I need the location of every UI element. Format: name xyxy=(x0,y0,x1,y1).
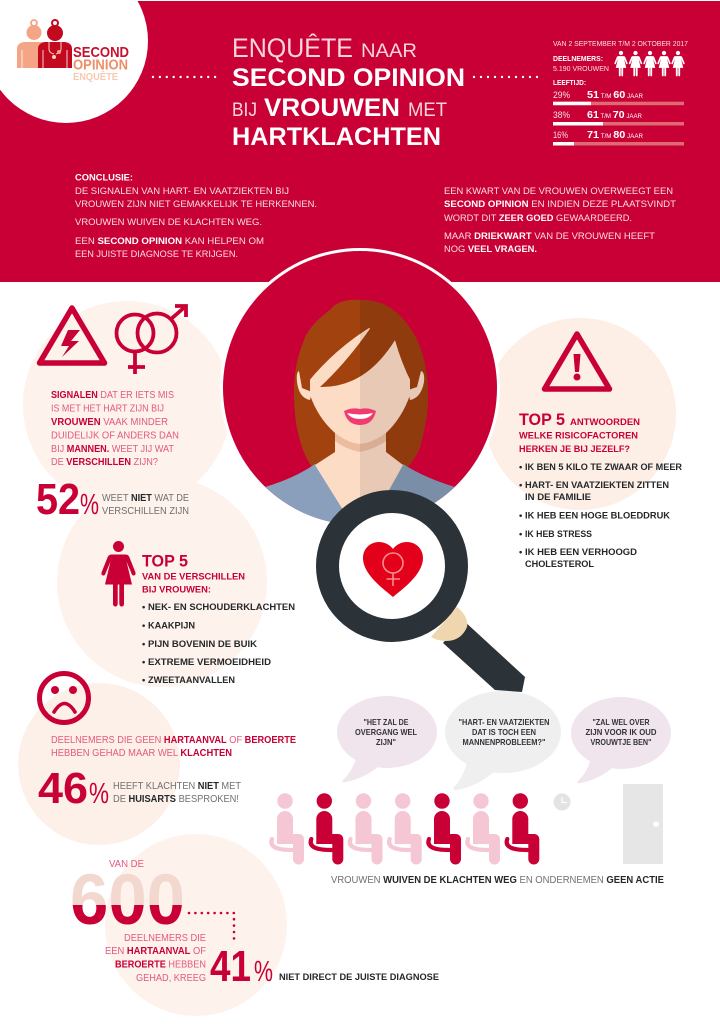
panel: top 5 risk factors: HART- EN VAATZIEKTEN ZITTEN xyxy=(525,479,669,490)
waiting room: seated women xyxy=(271,793,539,864)
panel: top 5 risk factors: IK HEB STRESS xyxy=(525,528,592,539)
text block: signals: SIGNALEN DAT ER IETS MIS xyxy=(51,390,174,401)
panel: top 5 differences: NEK- EN SCHOUDERKLACHTEN xyxy=(148,601,295,612)
text block: signals xyxy=(51,390,179,468)
background circle: signals xyxy=(23,301,231,509)
portrait: woman in red circle xyxy=(220,248,500,540)
background circle: complaints xyxy=(18,683,180,845)
magnifying glass xyxy=(328,502,525,692)
speech bubble: oud vrouwtje: ZIJN VOOR IK OUD xyxy=(586,727,656,737)
background circle: top 5 differences xyxy=(57,477,267,687)
text block: conclusion: CONCLUSIE: xyxy=(75,172,133,184)
stat: 52 percent: % xyxy=(80,489,99,521)
logo: second opinion enquete: OPINION xyxy=(73,58,128,74)
age bar 71-80: 16% xyxy=(553,130,568,141)
title: VROUWEN xyxy=(264,94,400,122)
icon: door xyxy=(623,784,663,864)
text block: conclusion: DE SIGNALEN VAN HART- EN VAATZIEKTEN BIJ xyxy=(75,186,289,197)
panel: top 5 risk factors: IN DE FAMILIE xyxy=(525,491,591,502)
title: ENQUÊTE xyxy=(232,32,353,63)
title: MET xyxy=(408,100,447,121)
panel: survey details: DEELNEMERS: xyxy=(553,54,603,63)
panel: top 5 risk factors: HERKEN JE BIJ JEZELF? xyxy=(519,444,630,455)
header band xyxy=(0,1,720,282)
stat: 52 percent: WEET NIET WAT DE xyxy=(102,493,189,504)
number: 600 partly filled xyxy=(72,874,182,924)
panel: top 5 differences: • xyxy=(142,620,145,630)
panel: top 5 risk factors xyxy=(519,410,682,569)
stat: 46 percent: 46 xyxy=(38,764,88,813)
panel: top 5 risk factors: IK HEB EEN VERHOOGD xyxy=(525,546,637,557)
text block: signals: DUIDELIJK OF ANDERS DAN xyxy=(51,430,179,442)
age bar 61-70: 61 T/M 70 JAAR xyxy=(587,109,643,121)
panel: top 5 risk factors: IK BEN 5 KILO TE ZWAAR OF MEER xyxy=(525,461,682,472)
text block: signals: IS MET HET HART ZIJN BIJ xyxy=(51,404,164,414)
icon: sad face xyxy=(40,674,88,722)
icon: clock xyxy=(554,794,570,810)
text block: complaints xyxy=(51,735,296,759)
icon: male and female symbols xyxy=(116,306,186,374)
logo: second opinion enquete xyxy=(17,20,129,83)
panel: top 5 risk factors: IK HEB EEN HOGE BLOEDDRUK xyxy=(525,510,670,520)
text block: signals: DE VERSCHILLEN ZIJN? xyxy=(51,457,158,468)
title: NAAR xyxy=(361,41,417,62)
text block: second opinion findings: NOG VEEL VRAGEN. xyxy=(444,244,537,255)
logo circle xyxy=(0,0,148,123)
text block: conclusion: VROUWEN WUIVEN DE KLACHTEN WEG. xyxy=(75,217,262,228)
text block: signals: BIJ MANNEN. WEET JIJ WAT xyxy=(51,444,174,455)
speech bubble: mannenprobleem: MANNENPROBLEEM?" xyxy=(462,737,546,747)
label: van de: VAN DE xyxy=(109,859,144,870)
dotted connector to 41 percent xyxy=(189,913,234,943)
stat: 46 percent xyxy=(38,764,241,813)
speech bubble: overgang: "HET ZAL DE xyxy=(364,717,409,727)
panel: top 5 risk factors: CHOLESTEROL xyxy=(525,558,594,569)
title: SECOND OPINION xyxy=(232,64,465,92)
icon: woman xyxy=(101,541,136,606)
age bar 71-80 xyxy=(553,129,684,146)
speech bubble: oud vrouwtje: "ZAL WEL OVER xyxy=(592,717,650,727)
panel: survey details xyxy=(553,39,688,146)
number: 600 partly filled: 600 xyxy=(70,861,185,940)
logo: second opinion enquete: ENQUÊTE xyxy=(73,70,118,83)
speech bubble: overgang: OVERGANG WEL xyxy=(355,727,417,737)
text block: conclusion: VROUWEN ZIJN NIET GEMAKKELIJK TE HERKENNEN. xyxy=(75,199,317,210)
panel: top 5 risk factors: • xyxy=(519,479,522,490)
panel: top 5 differences: ZWEETAANVALLEN xyxy=(148,674,235,685)
age bar 51-60 xyxy=(553,89,684,105)
text block: conclusion: EEN SECOND OPINION KAN HELPEN OM xyxy=(75,236,264,247)
text block: complaints: HEBBEN GEHAD MAAR WEL KLACHTEN xyxy=(51,748,232,759)
panel: top 5 risk factors: • xyxy=(519,461,522,472)
panel: survey details: 5.190 VROUWEN xyxy=(553,64,609,73)
panel: top 5 risk factors: • xyxy=(519,546,522,557)
panel: top 5 risk factors: • xyxy=(519,528,522,539)
logo: second opinion enquete: SECOND xyxy=(73,44,129,61)
dotted connector left xyxy=(153,76,222,78)
stat: 52 percent xyxy=(36,475,189,524)
panel: survey details: LEEFTIJD: xyxy=(553,78,586,87)
panel: top 5 differences: BIJ VROUWEN: xyxy=(142,584,211,596)
panel: top 5 risk factors: TOP 5 xyxy=(519,410,565,429)
panel: top 5 differences: EXTREME VERMOEIDHEID xyxy=(148,656,271,667)
text block: heart attack participants: GEHAD, KREEG xyxy=(136,973,206,984)
panel: top 5 differences: • xyxy=(142,674,145,685)
stat: 46 percent: DE HUISARTS BESPROKEN! xyxy=(113,794,239,805)
text block: second opinion findings xyxy=(444,186,676,255)
stat: 52 percent: 52 xyxy=(36,475,80,524)
icon: warning high voltage xyxy=(40,308,104,363)
age bar 61-70: 38% xyxy=(553,110,570,121)
text block: conclusion xyxy=(75,172,317,260)
age bar 61-70 xyxy=(553,109,684,126)
text block: heart attack participants: BEROERTE HEBBEN xyxy=(115,960,206,970)
panel: top 5 risk factors: ANTWOORDEN xyxy=(570,417,640,428)
background circle: 600 participants xyxy=(105,834,287,1016)
stat: 46 percent: HEEFT KLACHTEN NIET MET xyxy=(113,781,241,792)
speech bubble: oud vrouwtje: VROUWTJE BEN" xyxy=(590,737,652,747)
age bar 51-60: 51 T/M 60 JAAR xyxy=(587,89,644,101)
text block: heart attack participants xyxy=(105,933,206,984)
panel: top 5 differences: VAN DE VERSCHILLEN xyxy=(142,572,245,582)
age bar 51-60: 29% xyxy=(553,90,570,101)
icon: heart with female symbol xyxy=(363,542,423,597)
stat: 41 percent: NIET DIRECT DE JUISTE DIAGNOSE xyxy=(279,971,439,982)
stat: 41 percent: % xyxy=(254,956,273,988)
speech bubble: mannenprobleem xyxy=(445,691,561,790)
title xyxy=(232,32,465,151)
stat: 46 percent: % xyxy=(89,778,109,810)
title: HARTKLACHTEN xyxy=(232,123,441,151)
speech bubble: oud vrouwtje xyxy=(571,697,671,783)
text block: signals: VROUWEN VAAK MINDER xyxy=(51,417,168,428)
text block: heart attack participants: DEELNEMERS DIE xyxy=(124,933,206,944)
panel: top 5 risk factors: • xyxy=(519,510,522,520)
panel: top 5 risk factors: WELKE RISICOFACTOREN xyxy=(519,430,638,442)
panel: survey details: VAN 2 SEPTEMBER T/M 2 OKTOBER 2017 xyxy=(553,39,688,48)
caption: waiting room: VROUWEN WUIVEN DE KLACHTEN WEG EN ONDERNEMEN GEEN ACTIE xyxy=(331,875,664,886)
stat: 41 percent: 41 xyxy=(210,942,251,991)
panel: top 5 differences: KAAKPIJN xyxy=(148,620,195,630)
panel: top 5 differences xyxy=(142,552,295,685)
text block: conclusion: EEN JUISTE DIAGNOSE TE KRIJGEN. xyxy=(75,249,238,260)
text block: second opinion findings: MAAR DRIEKWART VAN DE VROUWEN HEEFT xyxy=(444,231,655,242)
text block: second opinion findings: SECOND OPINION EN INDIEN DEZE PLAATSVINDT xyxy=(444,199,676,210)
panel: top 5 differences: • xyxy=(142,601,145,612)
speech bubble: mannenprobleem: "HART- EN VAATZIEKTEN xyxy=(458,717,550,727)
age bar 71-80: 71 T/M 80 JAAR xyxy=(587,129,644,141)
text block: heart attack participants: EEN HARTAANVAL OF xyxy=(105,946,206,957)
panel: top 5 differences: TOP 5 xyxy=(142,552,188,570)
stat: 52 percent: VERSCHILLEN ZIJN xyxy=(102,506,189,517)
icon: warning exclamation xyxy=(544,334,610,389)
speech bubble: overgang: ZIJN" xyxy=(376,737,396,747)
icons: five women xyxy=(614,51,685,76)
speech bubble: overgang xyxy=(337,696,437,782)
background circle: risk factors xyxy=(484,318,676,510)
number: 600 partly filled: 600 xyxy=(70,861,185,940)
text block: second opinion findings: WORDT DIT ZEER GOED GEWAARDEERD. xyxy=(444,213,632,224)
dotted connector right xyxy=(474,76,544,78)
panel: top 5 differences: PIJN BOVENIN DE BUIK xyxy=(148,638,257,649)
title: BIJ xyxy=(232,100,257,121)
speech bubble: mannenprobleem: DAT IS TOCH EEN xyxy=(472,727,536,737)
stat: 41 percent xyxy=(210,942,439,991)
panel: top 5 differences: • xyxy=(142,638,145,649)
panel: top 5 differences: • xyxy=(142,656,145,667)
text block: second opinion findings: EEN KWART VAN DE VROUWEN OVERWEEGT EEN xyxy=(444,186,673,197)
text block: complaints: DEELNEMERS DIE GEEN HARTAANVAL OF BEROERTE xyxy=(51,735,296,746)
